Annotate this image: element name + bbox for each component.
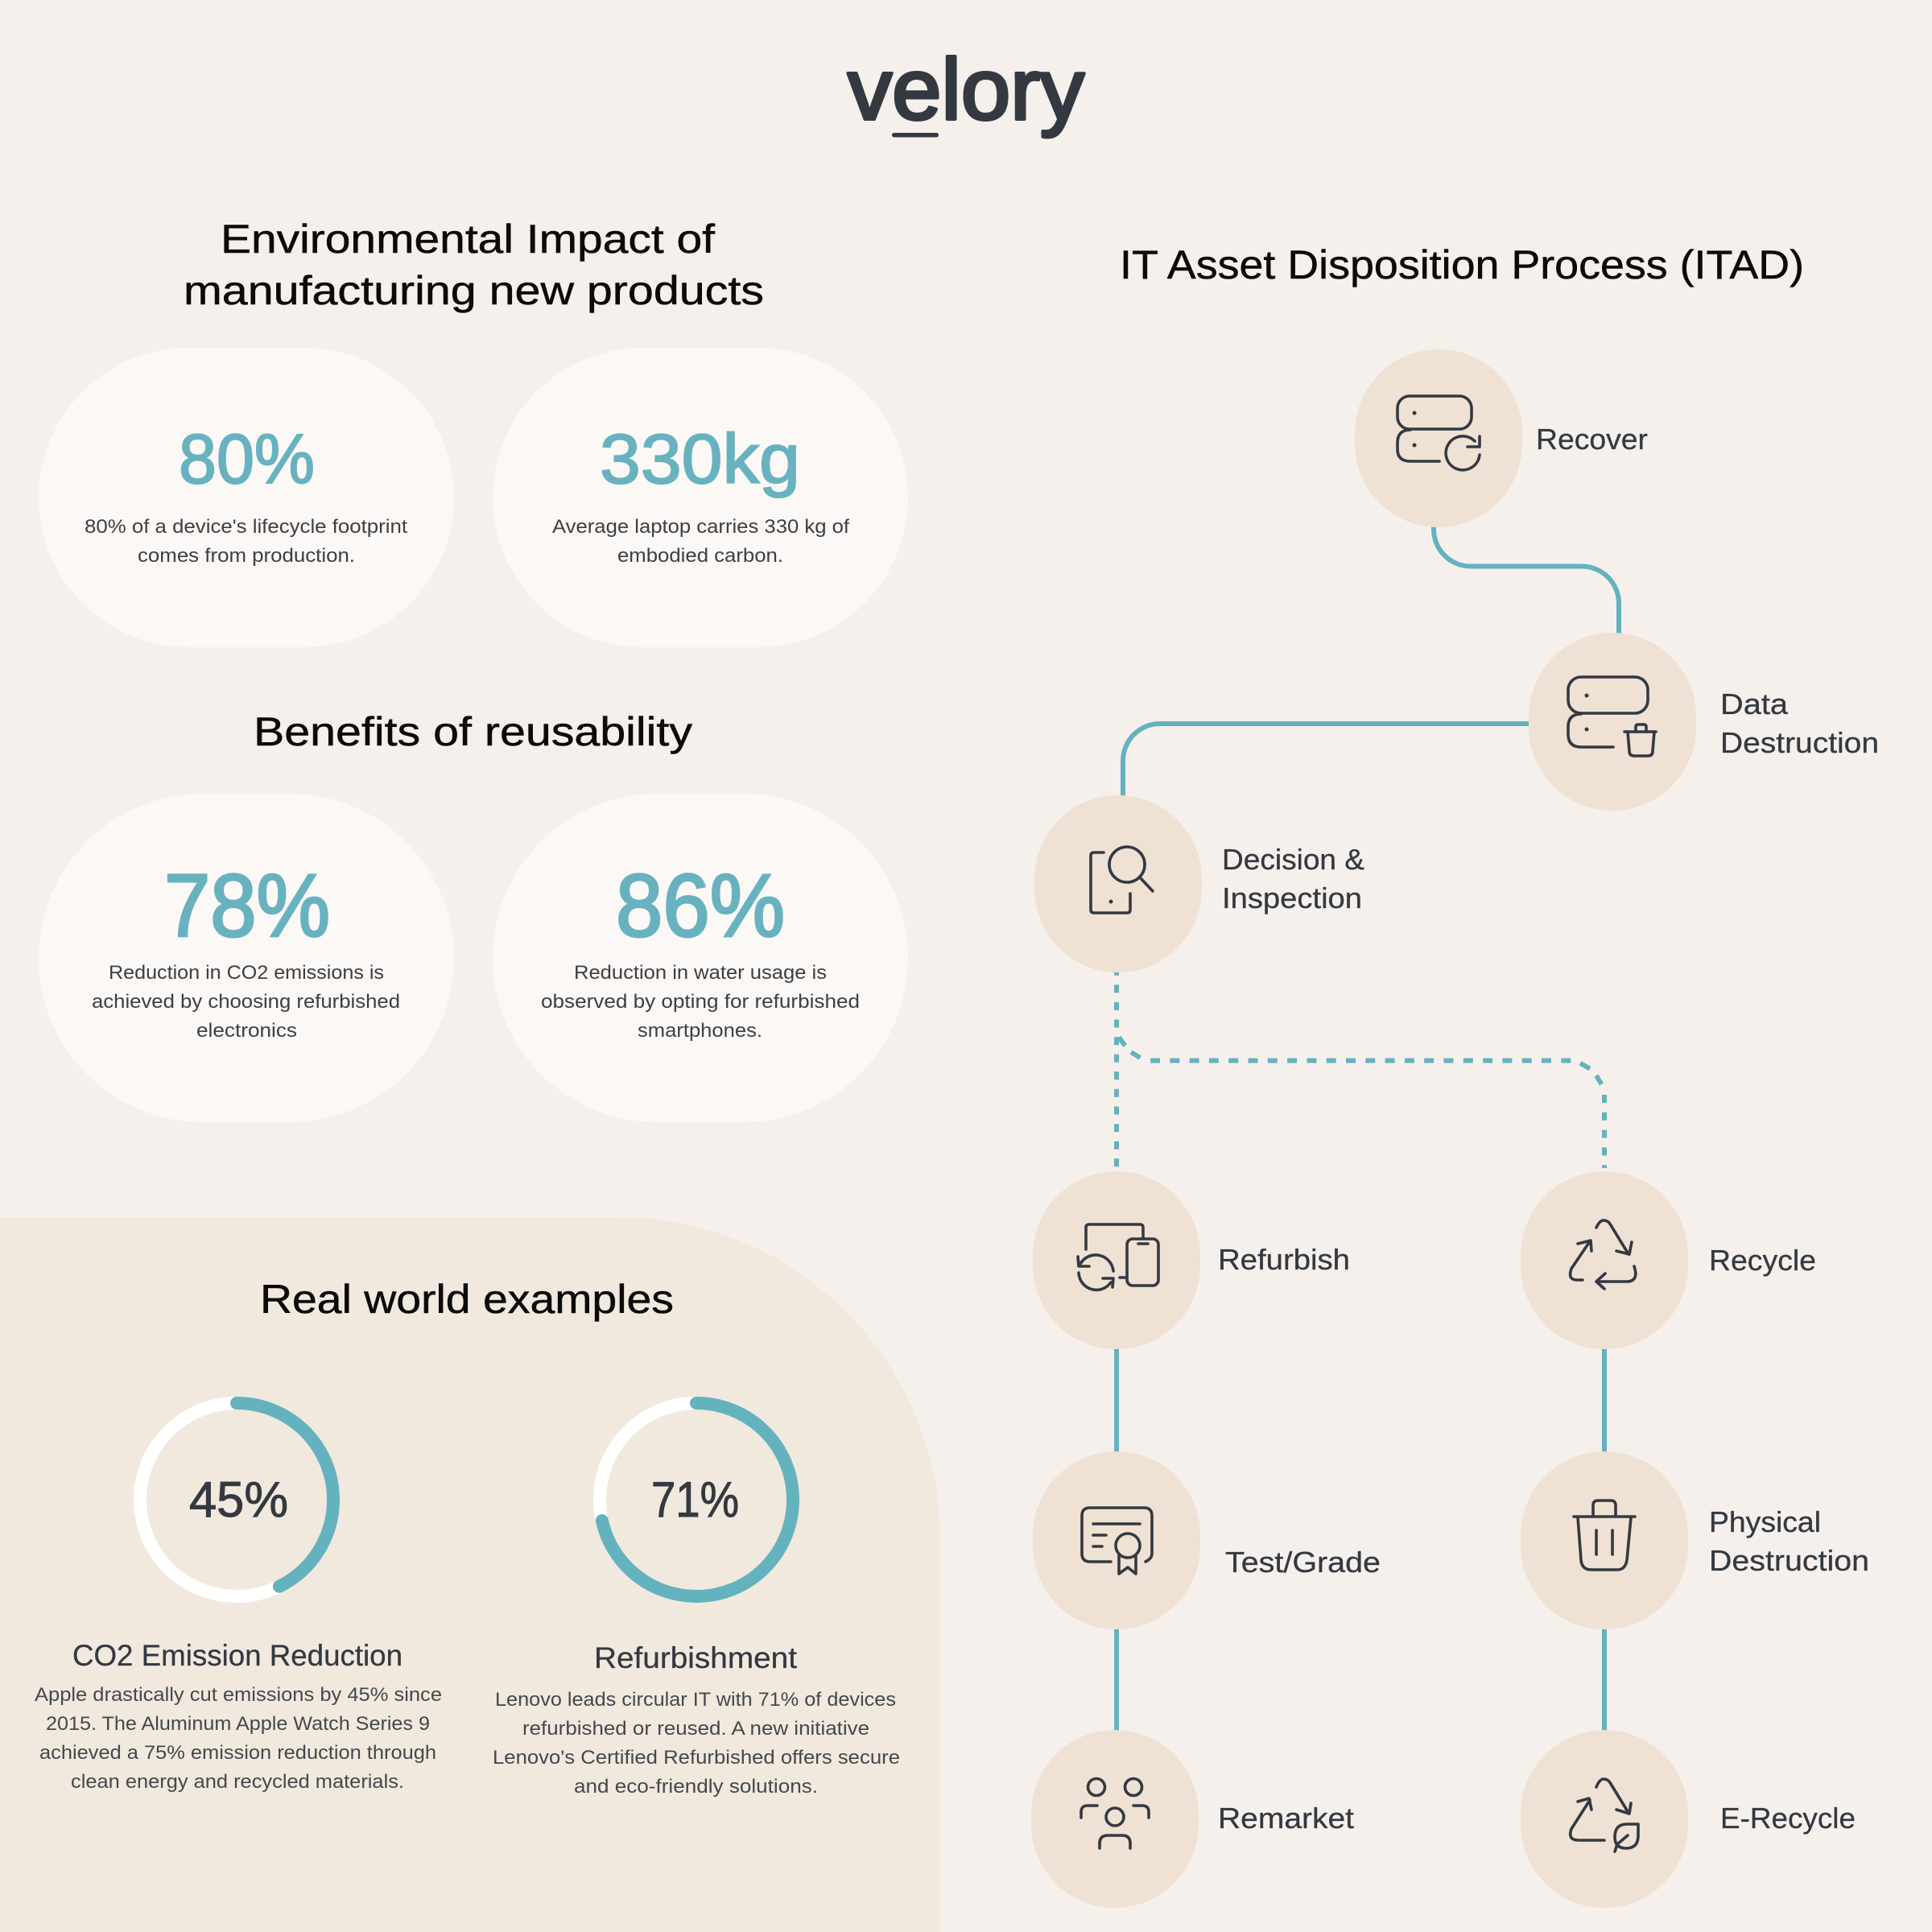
stat card: 78%: achieved by choosing refurbished bbox=[92, 991, 400, 1013]
heading: environmental impact: manufacturing new products bbox=[184, 268, 764, 313]
example text: refurbishment: Lenovo leads circular IT with 71% of devices bbox=[495, 1689, 896, 1711]
step: e-recycle bbox=[1521, 1730, 1856, 1908]
stat card: 86% bbox=[493, 794, 908, 1122]
label: decision and inspection bbox=[1222, 843, 1364, 914]
example text: CO2 emission reduction: achieved a 75% emission reduction through bbox=[39, 1742, 436, 1764]
step: test and grade: Test/Grade bbox=[1225, 1546, 1381, 1579]
step: e-recycle: E-Recycle bbox=[1720, 1802, 1856, 1835]
example text: refurbishment: Lenovo's Certified Refurbished offers secure bbox=[493, 1747, 900, 1769]
icon: recycle bbox=[1571, 1220, 1636, 1289]
example text: refurbishment: refurbished or reused. A new initiative bbox=[522, 1718, 869, 1740]
icon: recycle leaf bbox=[1571, 1779, 1638, 1852]
stat card: 86%: 86% bbox=[616, 857, 785, 956]
example text: CO2 emission reduction: CO2 Emission Reduction bbox=[72, 1639, 402, 1672]
icon: people bbox=[1081, 1779, 1149, 1848]
stat card: 330kg: Average laptop carries 330 kg of bbox=[552, 516, 849, 538]
label: physical destruction: Physical bbox=[1709, 1505, 1821, 1538]
heading: environmental impact: Environmental Impact of bbox=[221, 217, 715, 262]
donut chart: 45% bbox=[140, 1403, 333, 1596]
donut chart: 71%: 71% bbox=[651, 1472, 739, 1528]
connector: data destruction to decision bbox=[1123, 724, 1534, 799]
label: data destruction bbox=[1720, 687, 1879, 759]
connector: test to remarket bbox=[1114, 1626, 1119, 1733]
icon: certificate bbox=[1082, 1508, 1152, 1574]
step: remarket: Remarket bbox=[1218, 1802, 1354, 1835]
connector: refurbish to test bbox=[1114, 1346, 1119, 1455]
connector: decision to refurbish (dashed) bbox=[1114, 972, 1119, 1168]
stat card: 330kg: embodied carbon. bbox=[617, 545, 783, 567]
stat card: 78%: electronics bbox=[196, 1020, 297, 1042]
heading: ITAD process: IT Asset Disposition Process (ITAD) bbox=[1120, 242, 1804, 287]
heading: benefits: Benefits of reusability bbox=[254, 709, 692, 754]
logo: velory: velory bbox=[848, 40, 1084, 138]
label: decision and inspection: Decision & bbox=[1222, 843, 1364, 876]
connector: recover to data destruction bbox=[1434, 523, 1619, 636]
panel: benefits of reusability bbox=[39, 709, 908, 1122]
donut chart: 45%: 45% bbox=[189, 1472, 288, 1528]
stat card: 78%: 78% bbox=[164, 857, 330, 956]
example text: refurbishment bbox=[493, 1641, 900, 1798]
step: test and grade bbox=[1033, 1451, 1381, 1629]
example text: CO2 emission reduction: clean energy and recycled materials. bbox=[71, 1771, 404, 1793]
stat card: 86%: observed by opting for refurbished bbox=[541, 991, 860, 1013]
stat card: 80%: 80% of a device's lifecycle footprint bbox=[85, 516, 407, 538]
stat card: 86%: Reduction in water usage is bbox=[574, 962, 827, 984]
step: recover: Recover bbox=[1536, 423, 1648, 456]
stat card: 80%: 80% bbox=[179, 420, 315, 498]
step: recover bbox=[1355, 349, 1648, 527]
example text: refurbishment: Refurbishment bbox=[594, 1641, 798, 1674]
example text: CO2 emission reduction bbox=[35, 1639, 442, 1793]
step: decision and inspection bbox=[1034, 795, 1364, 972]
stat card: 78% bbox=[39, 794, 454, 1122]
step: physical destruction bbox=[1521, 1451, 1869, 1629]
icon: server trash bbox=[1568, 677, 1656, 756]
icon: phone magnifier bbox=[1091, 847, 1153, 913]
label: physical destruction bbox=[1709, 1505, 1869, 1577]
label: data destruction: Data bbox=[1720, 687, 1789, 720]
step: remarket bbox=[1031, 1730, 1354, 1908]
step: recycle bbox=[1521, 1171, 1816, 1349]
panel: environmental impact bbox=[39, 217, 908, 647]
heading: environmental impact bbox=[184, 217, 764, 313]
example text: refurbishment: and eco-friendly solutions. bbox=[574, 1776, 818, 1798]
icon: server refresh bbox=[1397, 396, 1480, 470]
stat card: 330kg bbox=[493, 348, 908, 647]
step: refurbish: Refurbish bbox=[1218, 1243, 1350, 1276]
label: decision and inspection: Inspection bbox=[1222, 881, 1362, 914]
stat card: 78%: Reduction in CO2 emissions is bbox=[109, 962, 384, 984]
label: data destruction: Destruction bbox=[1720, 726, 1879, 759]
icon: devices sync bbox=[1078, 1224, 1158, 1290]
stat card: 330kg: 330kg bbox=[600, 420, 800, 498]
stat card: 80%: comes from production. bbox=[138, 545, 355, 567]
icon: trash can bbox=[1574, 1501, 1635, 1570]
example text: CO2 emission reduction: Apple drastically cut emissions by 45% since bbox=[35, 1684, 442, 1706]
connector: physical destruction to e-recycle bbox=[1602, 1626, 1607, 1733]
label: physical destruction: Destruction bbox=[1709, 1544, 1869, 1577]
stat card: 80% bbox=[39, 348, 454, 647]
step: data destruction bbox=[1529, 633, 1879, 811]
panel: real world examples bbox=[0, 1217, 940, 1932]
donut chart: 71% bbox=[600, 1403, 793, 1596]
step: refurbish bbox=[1033, 1171, 1350, 1349]
connector: recycle to physical destruction bbox=[1602, 1346, 1607, 1455]
connector: decision to recycle (dashed) bbox=[1119, 1037, 1604, 1168]
heading: real world examples: Real world examples bbox=[260, 1277, 674, 1322]
stat card: 86%: smartphones. bbox=[638, 1020, 762, 1042]
step: recycle: Recycle bbox=[1709, 1244, 1816, 1277]
example text: CO2 emission reduction: 2015. The Aluminum Apple Watch Series 9 bbox=[46, 1713, 430, 1735]
